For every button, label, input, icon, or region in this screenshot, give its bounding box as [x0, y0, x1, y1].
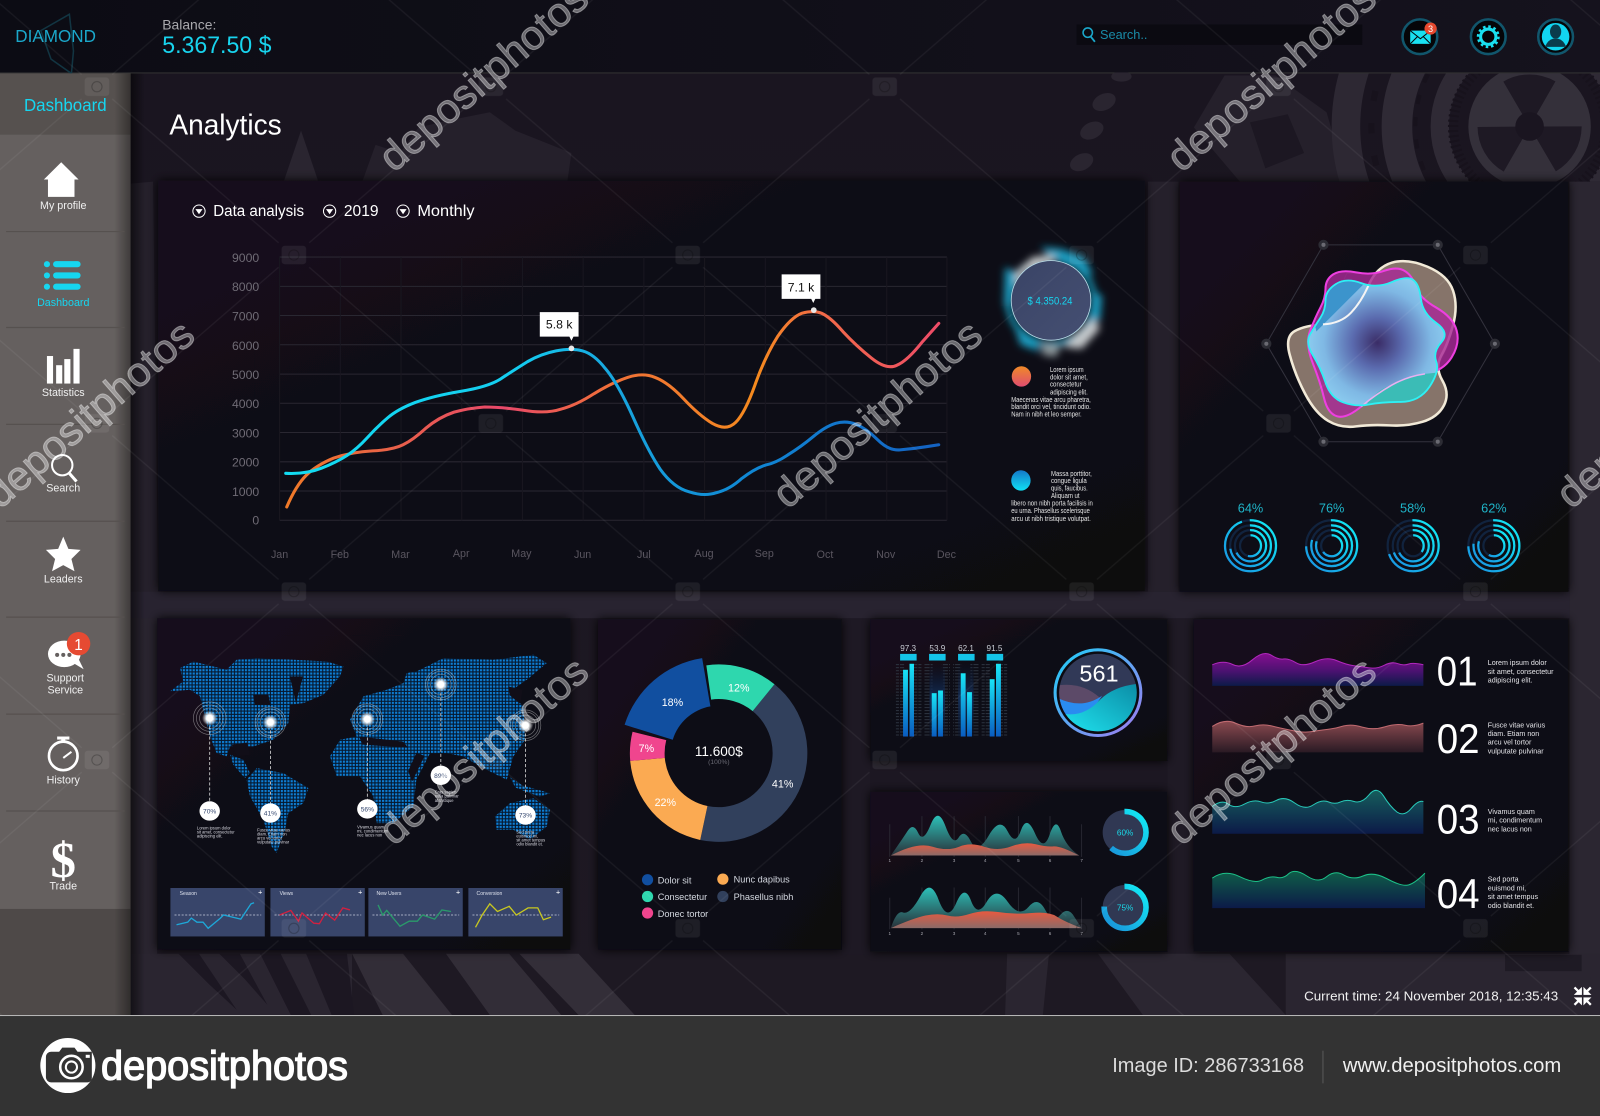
radar blob: cyan series [1308, 270, 1449, 408]
map pins with callouts: Cras sapien [435, 790, 456, 795]
area chart lower: 5 [1017, 931, 1020, 936]
balance: Balance: [162, 18, 216, 34]
bar values: 91.5 [987, 644, 1003, 653]
glowing balance gauge: $ 4.350.24 [1028, 296, 1072, 308]
ring 76% [1306, 501, 1357, 571]
watermarks: depositphotos [370, 647, 597, 853]
donut legend: Nunc dapibus [734, 874, 790, 884]
search box [1077, 24, 1362, 45]
bar values: 62.1 [958, 644, 974, 653]
filters row: Data analysis [213, 203, 304, 220]
wave 02: arcu vel tortor [1488, 739, 1532, 747]
panel: equalizer bars and gauge [870, 619, 1167, 761]
panel: radar chart and rings [1180, 182, 1568, 592]
panel: numbered wave list [1194, 619, 1568, 952]
nav: Trade: Trade [49, 881, 77, 893]
y axis labels: 3000 [232, 427, 259, 441]
map pins with callouts: odio blandit et. [516, 842, 543, 847]
map pins with callouts: Fusce vitae varius [257, 827, 290, 832]
x axis labels [271, 548, 957, 561]
nav: Dashboard list [37, 261, 89, 309]
y axis labels: 8000 [232, 280, 259, 294]
nav: History [47, 737, 81, 786]
map pins with callouts: nec lacus non [357, 832, 382, 837]
orange line series [287, 312, 939, 507]
wave 02: vulputate pulvinar [1488, 747, 1544, 755]
legend: orange series [1011, 366, 1091, 419]
donut percentages: 12% [728, 683, 750, 695]
map pins with callouts: nulla pulvinar [435, 794, 459, 799]
map pins with callouts: 56% [361, 806, 374, 813]
wave 03 [1212, 790, 1542, 842]
page title: Analytics [169, 110, 282, 142]
radar blob: magenta series [1308, 269, 1458, 417]
wave 04: euismod mi, [1488, 885, 1526, 893]
wave 04: 04 [1437, 870, 1480, 917]
logo DIAMOND: DIAMOND [15, 26, 96, 46]
x axis labels: Mar [391, 549, 410, 561]
donut legend: Consectetur [658, 892, 707, 902]
image id: Image ID: 286733168 [1112, 1055, 1304, 1077]
x axis labels: Sep [755, 548, 774, 560]
bar values: 97.3 [900, 644, 917, 653]
wave 04: odio blandit et. [1488, 902, 1534, 910]
wave 04: sit amet tempus [1488, 893, 1538, 901]
sidebar [0, 73, 145, 1015]
nav: Statistics [42, 349, 85, 399]
ring 58%: 58% [1400, 501, 1426, 516]
watermarks: depositphotos [763, 311, 991, 517]
legend: blue series: Massa porttitor, [1051, 471, 1092, 478]
map pins with callouts: vulputate pulvinar [257, 840, 290, 845]
x axis labels: Jul [637, 549, 651, 561]
map pins with callouts: adipiscing elit. [197, 834, 223, 839]
wave 04: Sed porta [1488, 875, 1519, 883]
tooltip 7.1 k: 7.1 k [788, 281, 815, 295]
ring 62% [1468, 501, 1519, 571]
y axis labels: 4000 [232, 397, 259, 411]
icon: user profile [1538, 19, 1573, 54]
panel: main line chart [158, 181, 1145, 591]
balance [162, 18, 272, 59]
footer bar [0, 1015, 1600, 1116]
watermarks [0, 0, 1600, 853]
nav: Support Service: Service [47, 685, 83, 697]
website: www.depositphotos.com [1342, 1055, 1561, 1077]
blue line series [286, 349, 939, 495]
map pins with callouts: 41% [264, 811, 277, 818]
y axis labels: 5000 [232, 368, 259, 382]
top bar [0, 0, 1600, 73]
legend: orange series: dolor sit amet, [1050, 374, 1088, 381]
legend: orange series: Maecenas vitae arcu pharetra, [1011, 397, 1091, 404]
legend: orange series: Nam in nibh et leo semper. [1011, 412, 1082, 419]
legend: orange series: adipiscing elit. [1050, 389, 1088, 396]
legend: blue series: eu urna. Phasellus scelerisque [1011, 508, 1090, 515]
gauge 75%: 75% [1117, 903, 1133, 912]
y axis labels: 9000 [232, 251, 259, 265]
x axis labels: May [511, 548, 532, 560]
nav: Leaders [44, 537, 83, 585]
main background [131, 73, 1600, 1015]
y axis labels: 7000 [232, 309, 259, 323]
icon: collapse arrows [1574, 987, 1591, 1005]
card: New Users sparkline [368, 888, 463, 936]
card: Conversion sparkline: Conversion [477, 891, 502, 897]
donut legend: Donec tortor [658, 909, 708, 919]
bottom strip streaks [131, 954, 352, 1015]
map pins with callouts: euismod mi, [516, 834, 538, 839]
area chart lower: 7 [1080, 931, 1083, 936]
tooltip 5.8 k [540, 312, 579, 351]
x axis labels: Aug [695, 548, 714, 560]
legend: blue series: Aliquam ut [1051, 493, 1080, 500]
donut percentages: 18% [662, 697, 684, 709]
legend: blue series: libero non nibh porta facilisis in [1011, 500, 1093, 507]
donut centre total [695, 744, 743, 766]
donut percentages: 7% [639, 743, 655, 755]
glowing balance gauge [1004, 247, 1102, 357]
panel: area charts with gauges [870, 792, 1167, 952]
y axis labels [232, 251, 259, 527]
area chart upper [889, 816, 1083, 863]
wave 01 [1212, 648, 1554, 695]
gauge 561: 561 [1079, 660, 1119, 686]
area chart lower: 4 [984, 931, 987, 936]
x axis labels: Dec [937, 549, 957, 561]
card: Conversion sparkline [468, 888, 563, 936]
dotted world map [170, 655, 550, 853]
x axis labels: Nov [876, 549, 896, 561]
y axis labels: 6000 [232, 339, 259, 353]
wave 01: Lorem ipsum dolor [1488, 659, 1547, 667]
legend: blue series: congue ligula [1051, 478, 1087, 485]
panel: donut chart [598, 619, 842, 950]
wave 01: sit amet, consectetur [1488, 668, 1554, 676]
filters row: Monthly [417, 203, 475, 220]
area chart lower: 6 [1049, 931, 1052, 936]
area chart upper: 1 [889, 858, 892, 863]
y axis labels: 1000 [232, 485, 259, 499]
nav: Trade: $ [51, 833, 76, 889]
x axis labels: Oct [817, 549, 833, 561]
donut legend [642, 874, 793, 919]
ring 62%: 62% [1481, 501, 1507, 516]
area chart lower: 1 [889, 931, 892, 936]
nav: Support Service: 1 [74, 637, 83, 654]
map pins with callouts: Vivamus quam [357, 824, 385, 829]
radar grid [1263, 241, 1498, 445]
tooltip 5.8 k: 5.8 k [546, 317, 573, 331]
wave 03: mi, condimentum [1488, 817, 1542, 825]
card: Season sparkline: + [258, 889, 262, 897]
legend: blue series: arcu ut nibh tristique volutpat. [1011, 516, 1091, 523]
area chart upper: 2 [921, 858, 924, 863]
chart grid [280, 257, 947, 520]
area chart upper: 4 [984, 858, 987, 863]
donut percentages: 41% [772, 779, 794, 791]
donut percentages: 22% [655, 797, 676, 809]
y axis labels: 2000 [232, 456, 259, 470]
wave 02: diam. Etiam non [1488, 730, 1539, 738]
area chart upper: 7 [1080, 858, 1083, 863]
icon: mail with badge [1403, 19, 1437, 54]
x axis labels: Jan [271, 549, 288, 561]
area chart lower: 3 [953, 931, 956, 936]
bar values: 53.9 [929, 644, 946, 653]
gauge 561 [1055, 650, 1141, 740]
filters row [193, 203, 475, 220]
nav: Statistics: Statistics [42, 387, 85, 399]
map pins with callouts: sit amet, consectetur [197, 829, 235, 834]
card: New Users sparkline: + [456, 889, 460, 897]
nav: Support Service: Support [47, 672, 84, 684]
wave 03: nec lacus non [1488, 825, 1532, 833]
ring 58% [1388, 501, 1439, 571]
wave 02: 02 [1437, 715, 1480, 762]
wave 01: adipiscing elit. [1488, 676, 1533, 684]
donut centre total: 11.600$ [695, 744, 743, 760]
card: New Users sparkline: New Users [377, 891, 402, 897]
nav: History: History [47, 774, 81, 786]
map pins with callouts [193, 669, 545, 847]
gauge 60%: 60% [1117, 828, 1133, 837]
area chart upper: 6 [1049, 858, 1052, 863]
filters row: 2019 [344, 203, 379, 220]
legend: orange series: consectetur [1050, 382, 1082, 389]
tooltip 7.1 k [782, 274, 820, 313]
bar values [900, 644, 1003, 653]
card: Views sparkline: + [358, 889, 362, 897]
logo DIAMOND [15, 14, 96, 73]
map pins with callouts: 73% [519, 813, 532, 820]
x axis labels: Feb [331, 549, 349, 561]
icon: mail with badge: 3 [1428, 24, 1433, 34]
nav heading: Dashboard: Dashboard [24, 95, 107, 115]
card: Season sparkline: Season [180, 891, 197, 897]
area chart upper: 5 [1017, 858, 1020, 863]
ring 64%: 64% [1238, 501, 1263, 516]
nav: Search [46, 455, 80, 495]
legend: blue series [1011, 470, 1093, 523]
nav: Support Service [47, 632, 90, 697]
map pins with callouts: sit amet tempus [516, 838, 545, 843]
current time status: Current time: 24 November 2018, 12:35:43 [1304, 989, 1558, 1004]
wave 03: Vivamus quam [1488, 808, 1535, 816]
area chart lower [889, 887, 1083, 936]
footer logo [40, 1038, 348, 1093]
wave 01: 01 [1437, 648, 1478, 695]
watermarks: depositphotos [1157, 647, 1385, 853]
card: Season sparkline [170, 888, 265, 936]
nav: Dashboard list: Dashboard [37, 297, 89, 309]
donut centre total: (100%) [708, 759, 730, 766]
panel: world map [157, 618, 570, 950]
legend: blue series: quis, faucibus. [1051, 486, 1088, 493]
map pins with callouts: 89% [434, 773, 448, 780]
x axis labels: Apr [453, 548, 470, 560]
icon: settings gear [1471, 19, 1506, 54]
area chart lower: 2 [921, 931, 924, 936]
nav: My profile: My profile [40, 200, 87, 212]
gauge 75% [1103, 885, 1148, 930]
footer logo: depositphotos [101, 1042, 348, 1088]
gauge 60% [1103, 810, 1148, 855]
map pins with callouts: mi, condimentum [357, 828, 389, 833]
donut legend: Dolor sit [658, 875, 692, 885]
legend: orange series: blandit orci vel, tincidunt odio. [1011, 404, 1091, 411]
map pins with callouts: at tristique [435, 798, 454, 803]
y axis labels: 0 [252, 513, 259, 527]
search box: Search.. [1100, 27, 1147, 42]
wave 04 [1212, 870, 1538, 917]
nav: My profile [40, 162, 87, 212]
card: Views sparkline [270, 888, 365, 936]
ring 76%: 76% [1319, 501, 1344, 516]
map pins with callouts: Sed porta [516, 829, 535, 834]
donut percentages [639, 683, 794, 809]
wave 02 [1212, 715, 1546, 762]
area chart upper: 3 [953, 858, 956, 863]
map pins with callouts: arcu vel tortor [257, 836, 283, 841]
nav: Leaders: Leaders [44, 573, 83, 585]
bar chart [896, 654, 1007, 738]
nav: Search: Search [46, 483, 80, 495]
legend: orange series: Lorem ipsum [1050, 367, 1084, 374]
wave 02: Fusce vitae varius [1488, 721, 1546, 729]
x axis labels: Jun [574, 549, 591, 561]
wave 03: 03 [1437, 795, 1480, 842]
balance: 5.367.50 $ [162, 32, 272, 59]
donut legend: Phasellus nibh [734, 892, 793, 902]
card: Views sparkline: Views [280, 891, 294, 897]
map pins with callouts: Lorem ipsum dolor [197, 825, 231, 830]
card: Conversion sparkline: + [556, 889, 560, 897]
donut slices [625, 658, 807, 842]
map pins with callouts: diam. Etiam non [257, 831, 287, 836]
radar blob: beige series [1288, 261, 1456, 427]
map pins with callouts: 70% [203, 809, 216, 816]
ring 64% [1225, 501, 1276, 571]
